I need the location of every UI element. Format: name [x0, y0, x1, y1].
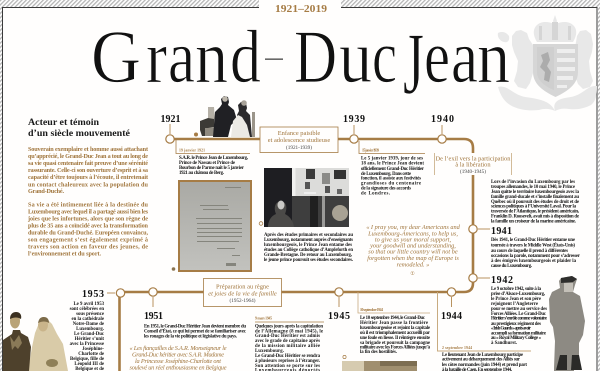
text youth: Après des études primaires et secondaires au: [264, 233, 353, 238]
text 1945 block: Le 10 septembre 1944, le Grand-Duc: [360, 316, 426, 321]
text 1945 left block: Grand-Duc Héritier est admis: [255, 334, 320, 339]
period box: enfance: (1921-1939): [286, 144, 312, 151]
text 1942: [491, 287, 547, 346]
text 1940: [491, 180, 580, 224]
text youth: Grande-Bretagne. De retour au Luxembourg,: [264, 253, 353, 258]
title: J: [403, 16, 424, 113]
year labels: 1951: [144, 311, 163, 322]
left intro text: son engagement s’est également exprimé à: [28, 236, 148, 244]
text 1945 block: 10 septembre 1944: [360, 308, 383, 312]
text 1942: prise d’Alsace-Luxembourg,: [491, 292, 546, 297]
date range heading: 1921–2019: [275, 4, 327, 15]
year labels: 1939: [343, 114, 365, 125]
left intro text: Souverain exemplaire et homme aussi attachant: [28, 146, 149, 153]
text 1951: les rouages de la vie politique et législative du pays.: [144, 334, 237, 340]
year labels: 1921: [160, 114, 180, 125]
text 1944: activement au débarquement des Alliés sur: [442, 358, 521, 362]
text 1921: Bourbon de Parme naît le 5 janvier: [179, 166, 245, 171]
text 1921: [179, 156, 249, 176]
text youth: études au Collège catholique d’Ampleforth en: [264, 248, 353, 253]
label 19 janvier 1921: 19 janvier 1921: [179, 148, 205, 152]
text 1945 left block: à plusieurs reprises à l’étranger.: [255, 359, 320, 364]
text 1941: cause du Luxembourg.: [491, 264, 532, 269]
coat of arms: [498, 15, 597, 111]
photo: soldier: [549, 276, 585, 371]
text 1953: en la cathédrale: [71, 317, 104, 322]
left intro text: Luxembourg avec lequel il a partagé aussi bien les: [28, 208, 149, 216]
period box: enfance: Enfance paisible: [278, 130, 320, 137]
text 1945 left block: de l’Allemagne (8 mai 1945), le: [255, 330, 323, 334]
text 1944: Le lieutenant Jean de Luxembourg participe: [442, 353, 523, 358]
title: c: [372, 16, 397, 99]
text 1953: Léopold III de: [74, 362, 104, 367]
quote 1940s: your goodwill and understanding,: [369, 242, 456, 250]
left intro text: Grand-Duché.: [28, 188, 64, 195]
text 1940: la famille un croiseur de la marine américaine.: [491, 220, 576, 224]
quote 1951: la Princesse Joséphine-Charlotte ont: [135, 358, 221, 365]
text 1944: [438, 292, 531, 371]
left intro text: durable du Grand-Duché. Européen convaincu,: [28, 230, 148, 236]
left intro text: Sa vie a été intimement liée à la destinée du: [28, 202, 149, 208]
text 1953: sous présence: [76, 312, 104, 317]
text 1941: tournée à travers le Middle West (États-Unis): [491, 242, 575, 248]
text 1945 block: où il est triomphalement accueilli par: [360, 331, 431, 336]
text 1953: [70, 302, 105, 371]
period box: exil: [434, 153, 512, 175]
period box: preparation: (1952-1964): [230, 297, 256, 304]
text 1945 left block: 9 mars 1945: [255, 316, 272, 320]
text 1945 left block: Luxembourg.: [255, 349, 284, 354]
left intro text: qu’apprécié, le Grand-Duc Jean a tout au long de: [28, 153, 148, 160]
text 1940: Lors de l’invasion du Luxembourg par les: [491, 180, 575, 185]
text 1940: Jean quitte le territoire luxembourgeois avec la: [491, 190, 580, 195]
text 1939: 15 janvier 1939: [362, 148, 379, 152]
year labels: 1945: [328, 311, 350, 322]
text 1945 block: sa brigade et poursuit la campagne: [360, 341, 430, 346]
title: [91, 16, 510, 113]
title: d: [230, 16, 261, 99]
text 1942: Forces Alliées. Le Grand-Duc: [491, 312, 547, 317]
text 1940: Québec où il poursuit des études de droit et de: [491, 200, 579, 205]
text 1945 block: luxembourgeoise et rejoint la capitale: [360, 326, 430, 331]
text 1939: officiellement Grand-Duc Héritier: [361, 167, 425, 172]
text 1942: Le 9 octobre 1942, suite à la: [491, 287, 542, 292]
text 1953: Luxembourg.: [76, 327, 104, 332]
text 1951: En 1951, le Grand-Duc Héritier Jean devient membre du: [144, 324, 246, 330]
text 1951: Conseil d’État, ce qui lui permet de se familiariser avec: [144, 328, 247, 334]
marker bottom photo: [343, 355, 346, 359]
left intro text: l’environnement et du sport.: [28, 250, 101, 258]
text 1945 left block: avec le grade de capitaine après: [255, 339, 320, 344]
text 1953: Héritier s’unit: [75, 337, 104, 342]
quote 1940s: « I pray you, my dear Americans and: [366, 224, 461, 231]
period box: preparation: et joies de la vie de famille: [208, 290, 277, 298]
period box: enfance: [260, 127, 338, 152]
text youth: [264, 233, 353, 263]
text 1941: [491, 238, 581, 269]
text 1941: Dès 1941, le Grand-Duc Héritier entame une: [491, 238, 575, 243]
text 1944: 2 septembre 1944: [442, 346, 472, 350]
quote 1951: [130, 345, 227, 371]
left intro text: rassurante. Celle-ci son ouverture d’esprit et à sa: [28, 167, 148, 174]
text 1942: le Prince Jean et son père: [491, 297, 541, 302]
text 1921: Prince de Nassau et Prince de: [179, 161, 235, 166]
left intro text: capacité d’être toujours à l’écoute, il entretenait: [28, 174, 149, 181]
text 1942: rejoignent l’Angleterre: [491, 302, 538, 307]
timeline circles: [116, 135, 477, 297]
text 1942: à Sandhurst.: [491, 341, 517, 346]
marker letter: [172, 267, 175, 271]
text 1942: pour se mettre au service des: [491, 307, 547, 312]
left intro heading: d’un siècle mouvementé: [28, 128, 130, 138]
text 1939: 18 ans, le Prince Jean devient: [361, 162, 424, 166]
text 1945 block: [358, 292, 431, 355]
text 1940: sciences politiques à l’Université Laval. Pour la: [491, 204, 577, 210]
text 1939: de Londres.: [361, 192, 390, 196]
text 1940: traversée de l’Atlantique, le président américain,: [491, 210, 580, 214]
text 1945 left block: Le Grand-Duc Héritier se rendra: [255, 354, 321, 359]
text 1940: troupes allemandes, le 10 mai 1940, le Prince: [491, 185, 575, 190]
year labels: 1953: [82, 289, 104, 300]
title: e: [424, 16, 450, 99]
left intro text: joies que les infortunes, alors que son règne de: [27, 216, 148, 222]
text youth: Luxembourg, notamment auprès d’enseignants: [264, 238, 353, 243]
left intro text: sa vie quasi centenaire fait preuve d’une sérénité: [28, 160, 148, 167]
text 1940: famille grand-ducale et s’installe finalement au: [491, 195, 579, 200]
text 1945 left block: de la mission militaire alliée: [255, 344, 320, 349]
photo: wedding couple: [3, 312, 68, 371]
text 1942: « Irish Guards » après avoir: [491, 326, 532, 332]
text 1953: Le Grand-Duc: [74, 332, 105, 337]
text 1945 block: Héritier Jean passe la frontière: [360, 321, 428, 326]
title: a: [168, 16, 195, 99]
text 1944: les côtes normandes (juin 1944) et prend part: [442, 363, 527, 368]
text 1941: à des émigrés luxembourgeois et plaider la: [491, 259, 577, 264]
text 1939: grandioses du centenaire: [361, 182, 421, 186]
text 1939: Le 5 janvier 1939, jour de ses: [361, 156, 423, 162]
title: D: [294, 16, 337, 99]
text youth: le jeune prince poursuit ses études secondaires.: [264, 258, 353, 263]
text 1945 left block: Quelques jours après la capitulation: [255, 324, 323, 330]
timeline line: [120, 139, 473, 371]
quote 1940s: so that our little country will not be: [368, 248, 458, 256]
period box: preparation: Préparation au règne: [216, 284, 269, 290]
quote 1940s: remodeled. »: [397, 262, 429, 268]
text 1939: [359, 141, 425, 196]
quote 1940s: [366, 224, 461, 277]
text 1921: 1921 au château de Berg.: [179, 171, 224, 176]
text 1939: de la signature des accords: [361, 186, 411, 192]
text 1939: fonction, il assiste aux festivités: [361, 176, 421, 182]
left intro text: plus de 35 ans a coïncidé avec la transformation: [28, 222, 149, 230]
text youth: luxembourgeois, le Prince Jean entame des: [264, 243, 352, 248]
text 1945 block: une foule en liesse. Il réintègre ensuite: [360, 336, 430, 341]
text 1940: Franklin D. Roosevelt, avait mis à disposition de: [491, 214, 579, 220]
year labels: 1944: [441, 311, 462, 322]
left intro heading: [28, 117, 130, 138]
text 1921: S.A.R. le Prince Jean de Luxembourg,: [179, 156, 249, 161]
text 1941: occasions la parole, notamment pour s’adresser: [491, 254, 581, 259]
title: n: [195, 16, 228, 99]
text 1953: Le 9 avril 1953: [73, 302, 105, 307]
year marker ticks: [107, 124, 490, 307]
text 1941: au cours de laquelle il prend à différentes: [491, 249, 568, 254]
photo: sepia street: [342, 361, 417, 371]
title: a: [451, 16, 478, 99]
text 1942: accompli sa formation militaire: [491, 332, 546, 336]
text 1939: de Luxembourg. Dans cette: [361, 172, 411, 177]
text 1953: Joséphine-: [82, 347, 104, 352]
photos: 1930s youth: [264, 168, 349, 227]
text 1945 block: militaire avec les Forces Alliées jusqu’à: [360, 346, 431, 350]
photo: royal family 1921: [200, 96, 255, 137]
text 1951: [144, 324, 247, 340]
quote 1951: Grand-Duc héritier avec S.A.R. Madame: [132, 352, 224, 358]
left intro text: [27, 146, 149, 258]
title: n: [477, 16, 510, 99]
left intro text: un contact chaleureux avec la population du: [28, 182, 149, 188]
year labels: [82, 114, 513, 322]
text 1945 left block: Son attention se porte sur les: [255, 364, 320, 369]
marker youth photo: [259, 222, 263, 225]
text 1942: Héritier s’enrôle comme volontaire: [491, 316, 547, 322]
period box: exil: à la libération: [455, 162, 491, 168]
title: G: [91, 16, 141, 99]
quote 1940s: to give us your moral support,: [375, 236, 452, 244]
year labels: 1942: [491, 275, 513, 286]
quote 1940s: Luxembourg-Americans, to help us,: [367, 230, 458, 238]
text 1953: sont célébrées en: [70, 307, 104, 312]
text 1942: au prestigieux régiment des: [491, 322, 541, 327]
text 1945 block: la fin des hostilités.: [360, 350, 397, 355]
text 1942: au « Royal Military College »: [491, 336, 542, 341]
text 1953: avec la Princesse: [70, 342, 104, 347]
photo: letter document: [179, 181, 251, 271]
text 1945 left block: [255, 316, 324, 371]
period box: exil: De l’exil vers la participation: [436, 156, 511, 162]
title: r: [146, 16, 167, 99]
quote 1951: « Les fiançailles de S.A.R. Monseigneur le: [130, 345, 227, 352]
period box: enfance: et adolescence studieuse: [268, 137, 330, 144]
left intro text: travers son action en faveur des jeunes, de: [28, 244, 148, 250]
marker dot 1921: [194, 132, 198, 136]
text 1953: Belgique, fille de: [70, 357, 104, 362]
period box: preparation: [204, 278, 282, 306]
timeline accent 1921: [176, 139, 250, 154]
quote 1940s: ①: [410, 271, 415, 277]
quote 1940s: forgotten when the map of Europe is: [367, 255, 459, 262]
text 1953: Charlotte de: [78, 352, 104, 357]
left intro heading: Acteur et témoin: [28, 117, 99, 127]
title: u: [339, 16, 372, 99]
year labels: 1940: [431, 114, 454, 125]
period box: exil: (1940-1945): [460, 168, 486, 175]
year labels: 1941: [491, 226, 512, 237]
text 1953: Notre-Dame de: [73, 322, 104, 327]
